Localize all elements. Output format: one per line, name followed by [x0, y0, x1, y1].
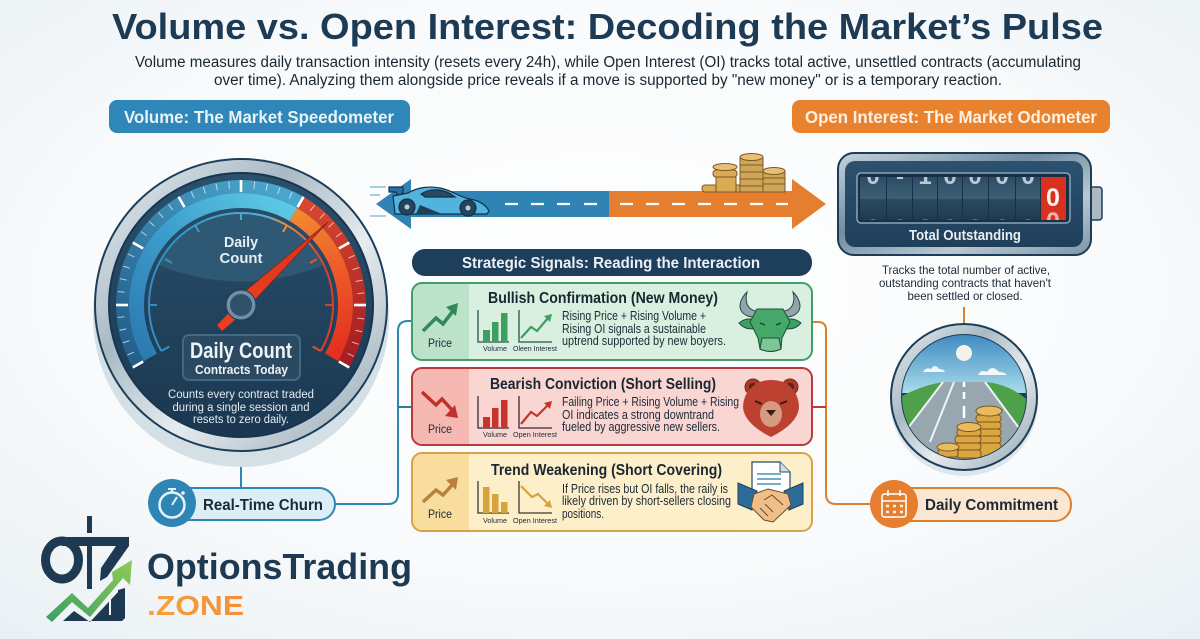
bullish description: uptrend supported by new boyers.	[562, 334, 726, 348]
bullish open interest chart: Oleen Interest	[513, 346, 557, 353]
intro text	[135, 54, 1081, 89]
double arrow	[376, 179, 826, 229]
icon: race car	[370, 187, 489, 216]
odometer digit cells: 0	[866, 215, 880, 242]
gauge readout: Contracts Today	[195, 362, 289, 377]
odometer digit cells: 1	[918, 163, 932, 190]
odometer digit cells: 0	[995, 163, 1009, 190]
weakening price label: Price	[428, 509, 452, 521]
heading: strategic signals	[412, 249, 812, 276]
bearish description	[562, 395, 739, 434]
odometer description: Tracks the total number of active,	[882, 263, 1050, 277]
odometer digit cells: 0	[943, 163, 957, 190]
odometer digit cells: 0	[1021, 163, 1035, 190]
panel: bearish conviction	[412, 368, 812, 445]
odometer digit cells: 0	[995, 215, 1009, 242]
icon: coin stacks	[702, 154, 785, 192]
heading: volume speedometer: Volume: The Market Speedometer	[124, 107, 394, 127]
logo	[46, 516, 412, 622]
weakening description	[562, 482, 731, 521]
bullish volume chart	[478, 310, 509, 353]
badge: real-time churn: Real-Time Churn	[203, 497, 323, 514]
gauge label: Count	[220, 250, 262, 267]
gauge description: during a single session and	[172, 402, 310, 414]
gauge tick band	[121, 185, 362, 365]
heading: open interest odometer: Open Interest: The Market Odometer	[805, 107, 1097, 127]
gauge readout	[183, 335, 300, 380]
bullish price label: Price	[428, 338, 452, 350]
intro text: over time). Analyzing them alongside price reveals if a move is supported by "new money" or is a temporary reaction.	[214, 72, 1002, 89]
bearish title: Bearish Conviction (Short Selling)	[490, 376, 716, 393]
gauge major ticks	[116, 180, 366, 368]
weakening title: Trend Weakening (Short Covering)	[491, 462, 722, 479]
badge: real-time churn	[148, 479, 335, 527]
bullish title: Bullish Confirmation (New Money)	[488, 290, 718, 307]
bullish price arrow	[423, 303, 458, 331]
odometer digit cells: 0	[893, 215, 907, 242]
title: Volume vs. Open Interest: Decoding the Market’s Pulse	[112, 6, 1103, 47]
odometer digit cells: 0	[866, 163, 880, 190]
road and coins medallion	[890, 323, 1038, 476]
connector lines: volume side	[241, 321, 412, 504]
odometer digit cells: 0	[918, 215, 932, 242]
intro text: Volume measures daily transaction intensity (resets every 24h), while Open Interest (OI) tracks total active, unsettled contracts (accumulating	[135, 54, 1081, 71]
heading: open interest odometer	[792, 100, 1110, 133]
odometer digit cells: 0	[1046, 184, 1060, 212]
bullish volume chart: Volume	[483, 346, 507, 353]
speedometer gauge	[93, 158, 389, 467]
bearish description: Failing Price + Rising Volume + Rising	[562, 395, 739, 409]
odometer digit cells: -	[896, 163, 904, 190]
bullish description: Rising OI signals a sustainable	[562, 322, 706, 336]
odometer digit cells: 0	[968, 163, 982, 190]
bullish open interest chart	[513, 310, 557, 353]
weakening open interest chart	[513, 481, 557, 525]
gauge colour band	[136, 200, 346, 357]
logo wordmark: OptionsTrading	[147, 546, 412, 587]
icon: handshake and contract	[738, 462, 803, 522]
bearish open interest chart: Open Interest	[513, 432, 557, 439]
bearish description: fueled by aggressive new sellers.	[562, 420, 720, 434]
bearish price label: Price	[428, 424, 452, 436]
logo mark	[46, 516, 132, 622]
bullish description	[562, 309, 726, 348]
gauge label	[220, 234, 262, 267]
connector lines: open interest side	[812, 307, 964, 504]
gauge inner scale	[149, 213, 333, 351]
bearish description: OI indicates a strong downtrand	[562, 408, 714, 422]
odometer digit cells: 0	[1021, 215, 1035, 242]
odometer description: outstanding contracts that haven't	[879, 276, 1052, 290]
icon: calendar	[870, 480, 918, 528]
gauge description: resets to zero daily.	[193, 414, 289, 426]
gauge needle	[217, 222, 328, 331]
logo zone: .ZONE	[147, 590, 244, 621]
heading: strategic signals: Strategic Signals: Reading the Interaction	[462, 255, 760, 272]
panel: bullish confirmation	[412, 283, 812, 360]
gauge description: Counts every contract traded	[168, 389, 314, 401]
panel: trend weakening	[412, 453, 812, 531]
weakening price arrow	[423, 477, 458, 502]
odometer digit cells: 0	[968, 215, 982, 242]
bearish volume chart	[478, 396, 509, 439]
weakening volume chart	[478, 481, 509, 525]
bullish description: Rising Price + Rising Volume +	[562, 309, 706, 323]
badge: daily commitment: Daily Commitment	[925, 497, 1059, 514]
gauge description	[168, 389, 314, 426]
weakening description: If Price rises but OI falls, the raily is	[562, 482, 728, 496]
badge: daily commitment	[870, 480, 1071, 528]
odometer description: been settled or closed.	[908, 289, 1022, 303]
icon: bear	[743, 379, 799, 437]
heading: volume speedometer	[109, 100, 410, 133]
weakening volume chart: Volume	[483, 518, 507, 525]
weakening open interest chart: Open Interest	[513, 518, 557, 525]
gauge readout: Daily Count	[190, 338, 293, 363]
odometer description	[879, 263, 1052, 303]
odometer digit cells: 0	[943, 215, 957, 242]
icon: bull	[739, 292, 801, 352]
odometer digit cells	[860, 177, 1066, 220]
odometer	[838, 153, 1102, 255]
gauge label: Daily	[224, 234, 259, 251]
icon: stopwatch	[148, 479, 196, 527]
bearish open interest chart	[513, 396, 557, 439]
weakening description: likely driven by short-sellers closing	[562, 494, 731, 508]
bearish price arrow	[422, 392, 458, 418]
odometer digit cells: 0	[1046, 208, 1060, 236]
weakening description: positions.	[562, 507, 604, 521]
odometer label: Total Outstanding	[909, 228, 1021, 244]
bearish volume chart: Volume	[483, 432, 507, 439]
